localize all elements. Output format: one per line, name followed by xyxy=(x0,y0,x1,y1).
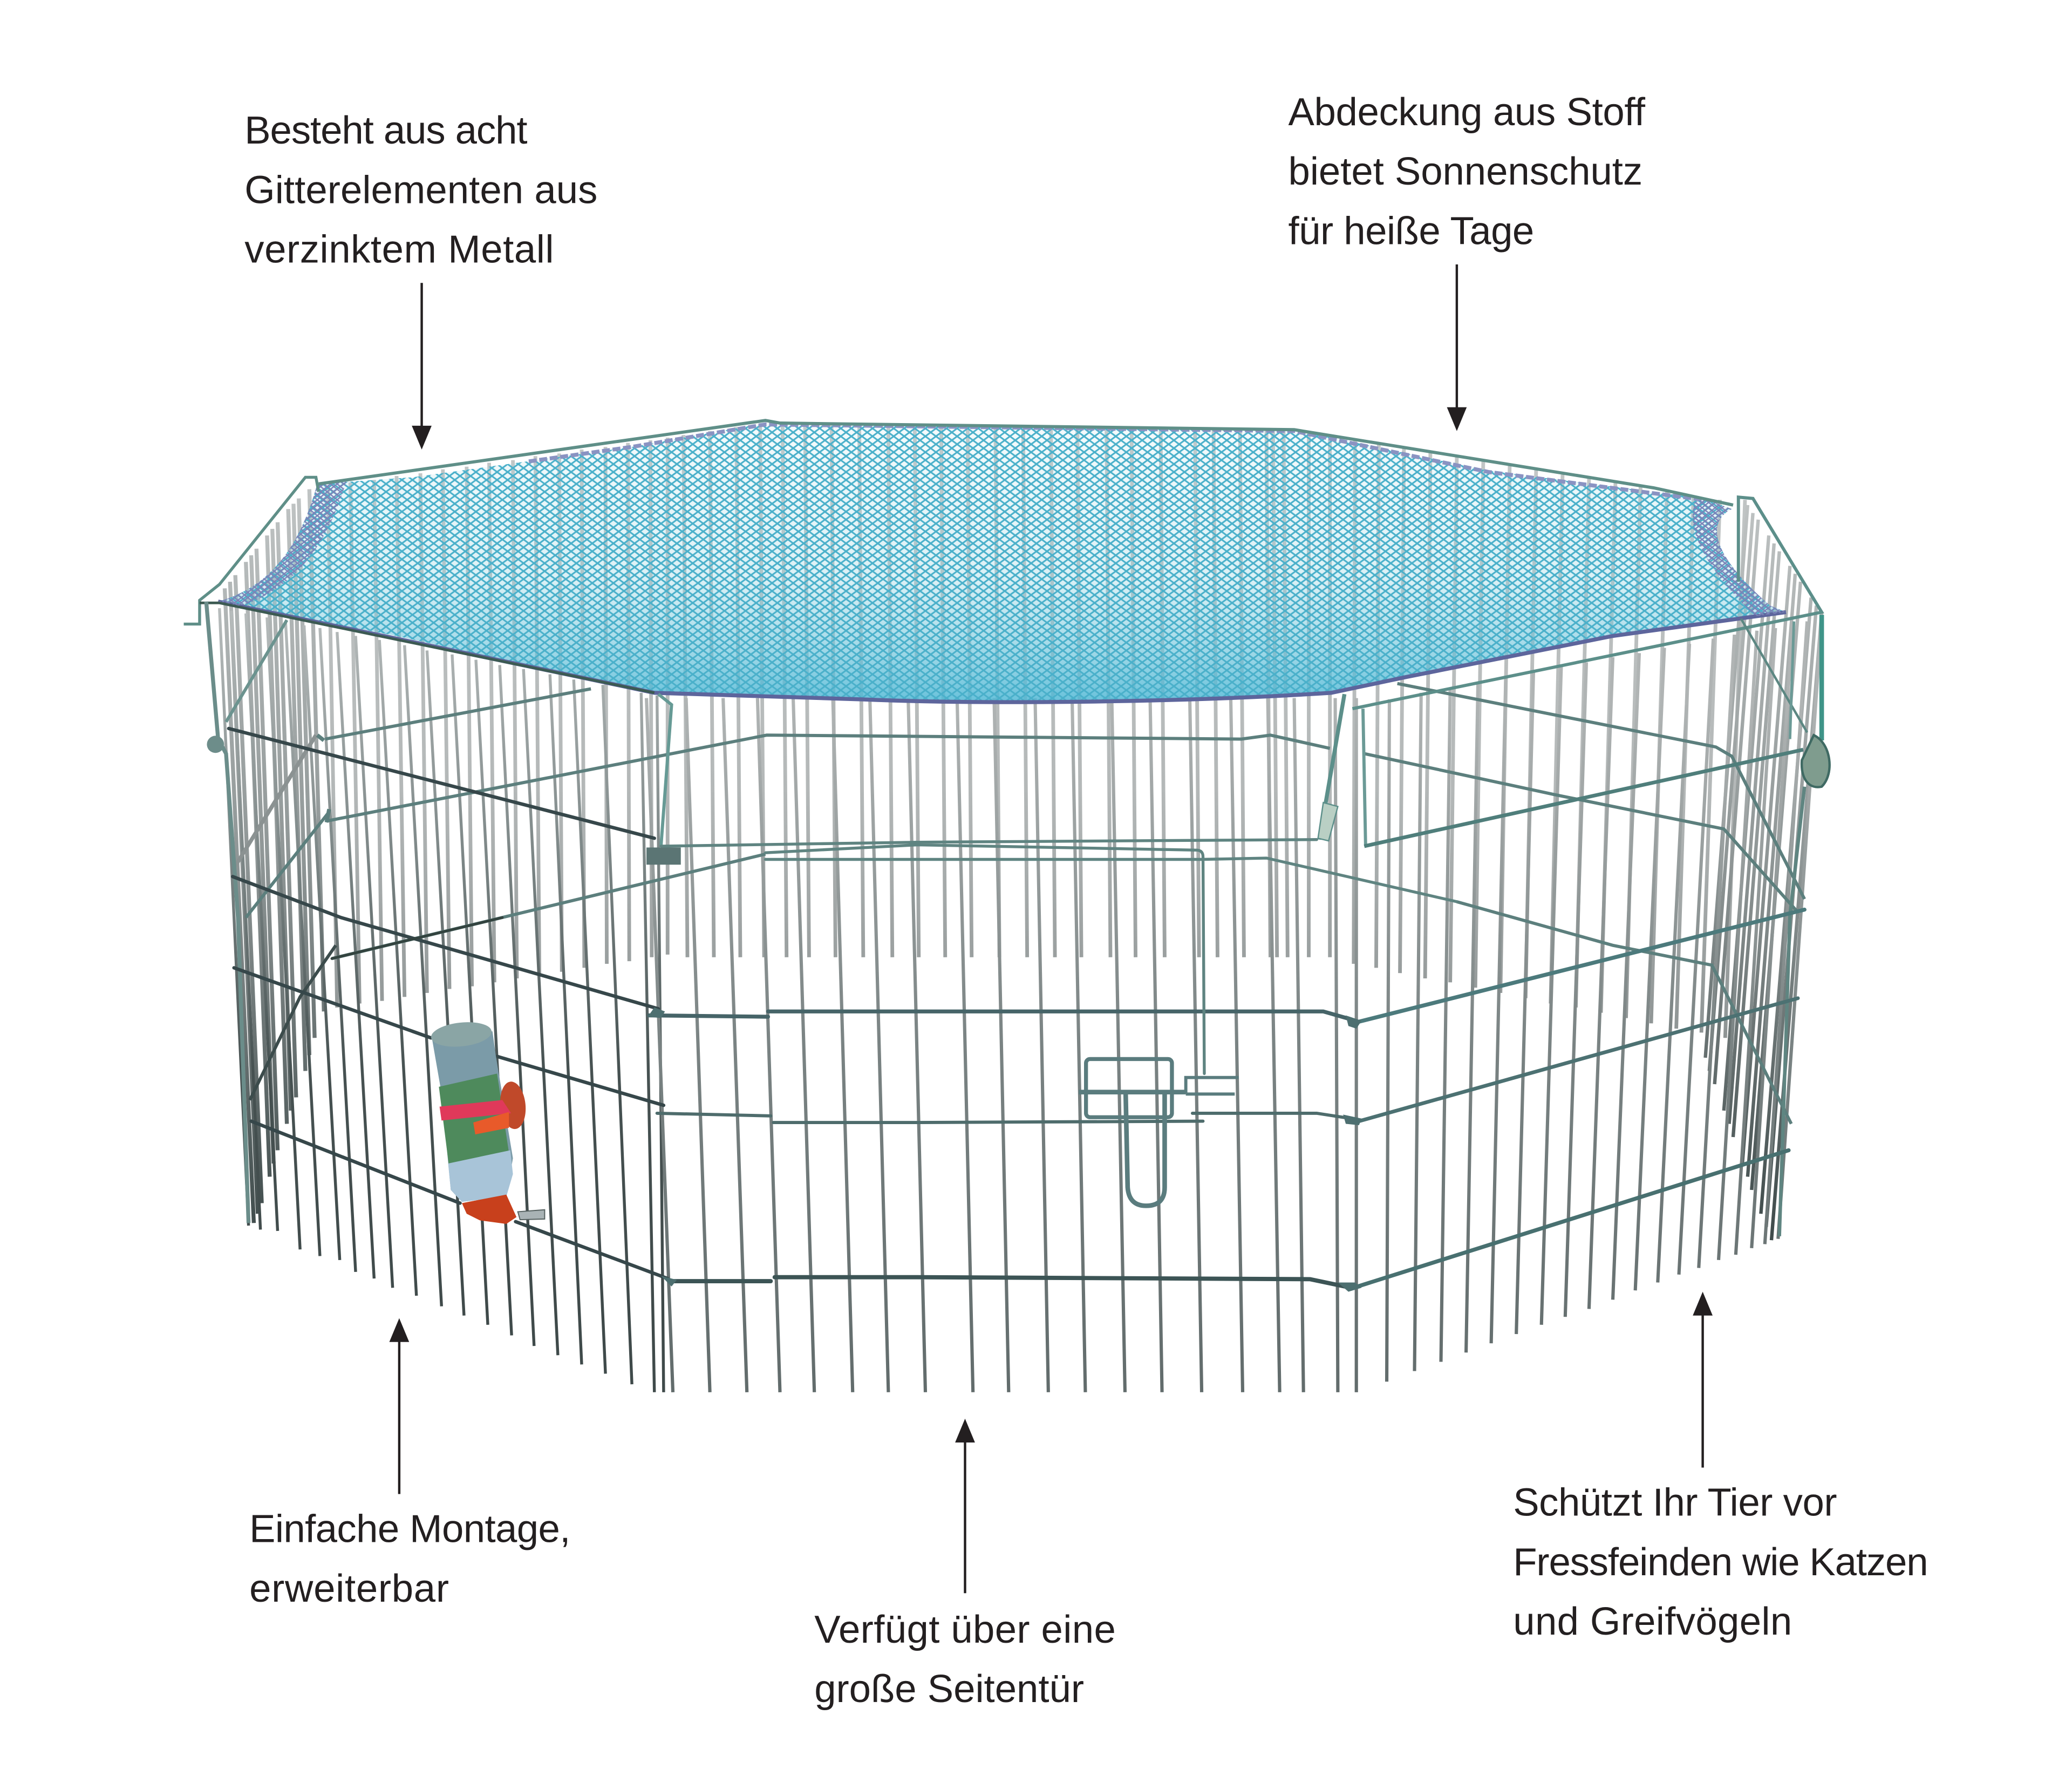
door latch xyxy=(1079,1059,1239,1206)
text: large side door xyxy=(814,1608,1116,1711)
metal spout xyxy=(518,1210,544,1220)
holder disc xyxy=(498,1080,528,1130)
text: easy assembly: erweiterbar xyxy=(249,1567,449,1610)
text: galvanised metal panels xyxy=(244,108,597,271)
rail joints xyxy=(648,1008,1361,1292)
text: protection from predators: Fressfeinden wie Katzen xyxy=(1513,1540,1928,1584)
net right corner band xyxy=(1693,499,1786,616)
latch catch xyxy=(1186,1078,1239,1094)
arrow: down to net xyxy=(1447,264,1467,431)
latch bolt xyxy=(1079,1091,1186,1093)
right wire knot xyxy=(1802,735,1830,787)
door frame xyxy=(661,840,1457,1073)
text: galvanised metal panels: Besteht aus acht xyxy=(244,108,528,152)
net top border xyxy=(529,424,1704,500)
callout: top right xyxy=(1289,90,1646,431)
text: galvanised metal panels: verzinktem Metall xyxy=(244,228,554,271)
arrow: up to door xyxy=(955,1419,975,1593)
front-left wire panel bars xyxy=(220,608,664,1392)
cross rail xyxy=(332,917,502,958)
callout: bottom right xyxy=(1513,1292,1928,1643)
latch frame xyxy=(1086,1059,1172,1117)
back horizontal rails xyxy=(226,620,1804,1124)
front left corner block xyxy=(646,847,681,865)
left latch ball xyxy=(207,736,224,753)
front-left rails xyxy=(229,729,667,1278)
front centre rails xyxy=(649,1011,1351,1019)
top frame rails xyxy=(184,420,1822,1236)
net fill xyxy=(218,423,1786,702)
latch handle xyxy=(1126,1093,1164,1206)
net left corner band xyxy=(218,481,346,607)
front centre wire panel bars xyxy=(646,698,1357,1392)
text: fabric cover: bietet Sonnenschutz xyxy=(1289,149,1642,193)
bottle cap xyxy=(430,1019,493,1050)
front-right rails xyxy=(1358,910,1804,1022)
right side panel bars xyxy=(1705,505,1822,1240)
text: easy assembly: Einfache Montage, xyxy=(249,1507,570,1551)
callout: bottom left xyxy=(249,1318,570,1610)
text: large side door: Verfügt über eine xyxy=(814,1608,1116,1651)
text: fabric cover: Abdeckung aus Stoff xyxy=(1289,90,1646,134)
callout: top left xyxy=(244,108,597,450)
net mesh xyxy=(218,423,1786,702)
text: protection from predators xyxy=(1513,1481,1928,1643)
text: easy assembly xyxy=(249,1507,570,1610)
text: protection from predators: Schützt Ihr Tier vor xyxy=(1513,1481,1837,1525)
text: fabric cover xyxy=(1289,90,1646,253)
arrow: up to left panel xyxy=(390,1318,409,1494)
callout: bottom centre xyxy=(814,1419,1116,1711)
arrow: up to right panel xyxy=(1693,1292,1713,1467)
water bottle xyxy=(430,1019,544,1224)
bottle green section xyxy=(439,1073,509,1170)
text: fabric cover: für heiße Tage xyxy=(1289,209,1534,253)
front-right wire panel bars xyxy=(1387,619,1822,1382)
left side panel bars xyxy=(225,489,324,1223)
text: large side door: große Seitentür xyxy=(814,1667,1084,1711)
arrow: down to frame xyxy=(412,283,432,450)
net border xyxy=(218,602,1786,702)
bottle water section xyxy=(448,1150,513,1202)
orange tag xyxy=(473,1112,509,1134)
middle and lower rails xyxy=(229,729,1804,1288)
text: galvanised metal panels: Gitterelementen aus xyxy=(244,168,597,212)
bottle body xyxy=(432,1031,513,1202)
red strap xyxy=(440,1100,511,1120)
pet enclosure illustration xyxy=(184,420,1830,1392)
right corner tag xyxy=(1318,802,1338,841)
text: protection from predators: und Greifvögeln xyxy=(1513,1600,1792,1643)
back wire panels xyxy=(328,424,1745,1038)
shade net cover xyxy=(218,423,1786,702)
red nozzle xyxy=(462,1195,516,1224)
